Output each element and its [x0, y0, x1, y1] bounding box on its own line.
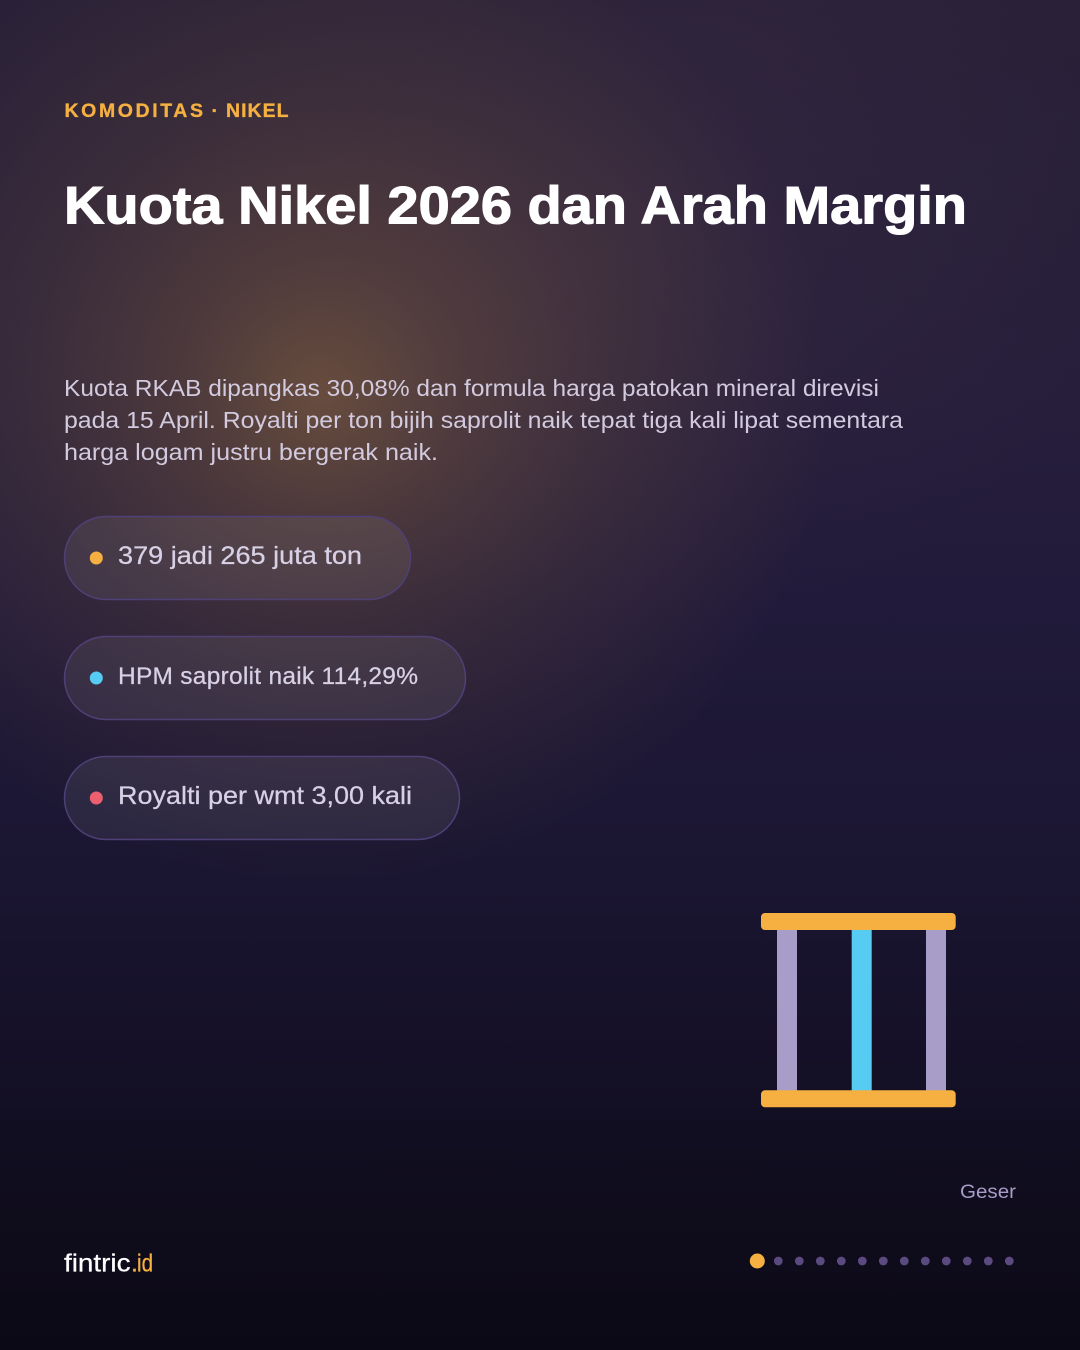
- intro paragraph: Kuota RKAB dipangkas 30,08% dan formula harga patokan mineral direvisi: [64, 375, 879, 401]
- pill: HPM saprolit: HPM saprolit naik 114,29%: [118, 663, 418, 690]
- intro paragraph: pada 15 April. Royalti per ton bijih saprolit naik tepat tiga kali lipat sementara: [64, 407, 904, 433]
- intro paragraph: harga logam justru bergerak naik.: [64, 439, 438, 465]
- title: Kuota Nikel 2026 dan Arah Margin: [64, 176, 967, 236]
- icon: pillars between two bars: [761, 913, 956, 1107]
- brand logo: id: [137, 1250, 153, 1278]
- pill: royalty: Royalti per wmt 3,00 kali: [118, 782, 412, 810]
- eyebrow: category label: ·: [212, 100, 218, 122]
- brand logo: fintric: [64, 1250, 130, 1278]
- pill: royalty: [64, 756, 460, 840]
- brand logo: .: [131, 1250, 138, 1278]
- eyebrow: category label: KOMODITAS: [64, 100, 203, 122]
- intro paragraph: [64, 375, 904, 465]
- pagination dots: [750, 1254, 1014, 1268]
- pill: quota cut: 379 jadi 265 juta ton: [118, 542, 362, 570]
- eyebrow: category label: [64, 100, 289, 122]
- swipe hint: Geser: [960, 1182, 1017, 1203]
- pill: HPM saprolit: [64, 636, 466, 720]
- eyebrow: category label: NIKEL: [226, 100, 289, 122]
- pill: quota cut: [64, 516, 410, 600]
- brand logo: [64, 1250, 153, 1278]
